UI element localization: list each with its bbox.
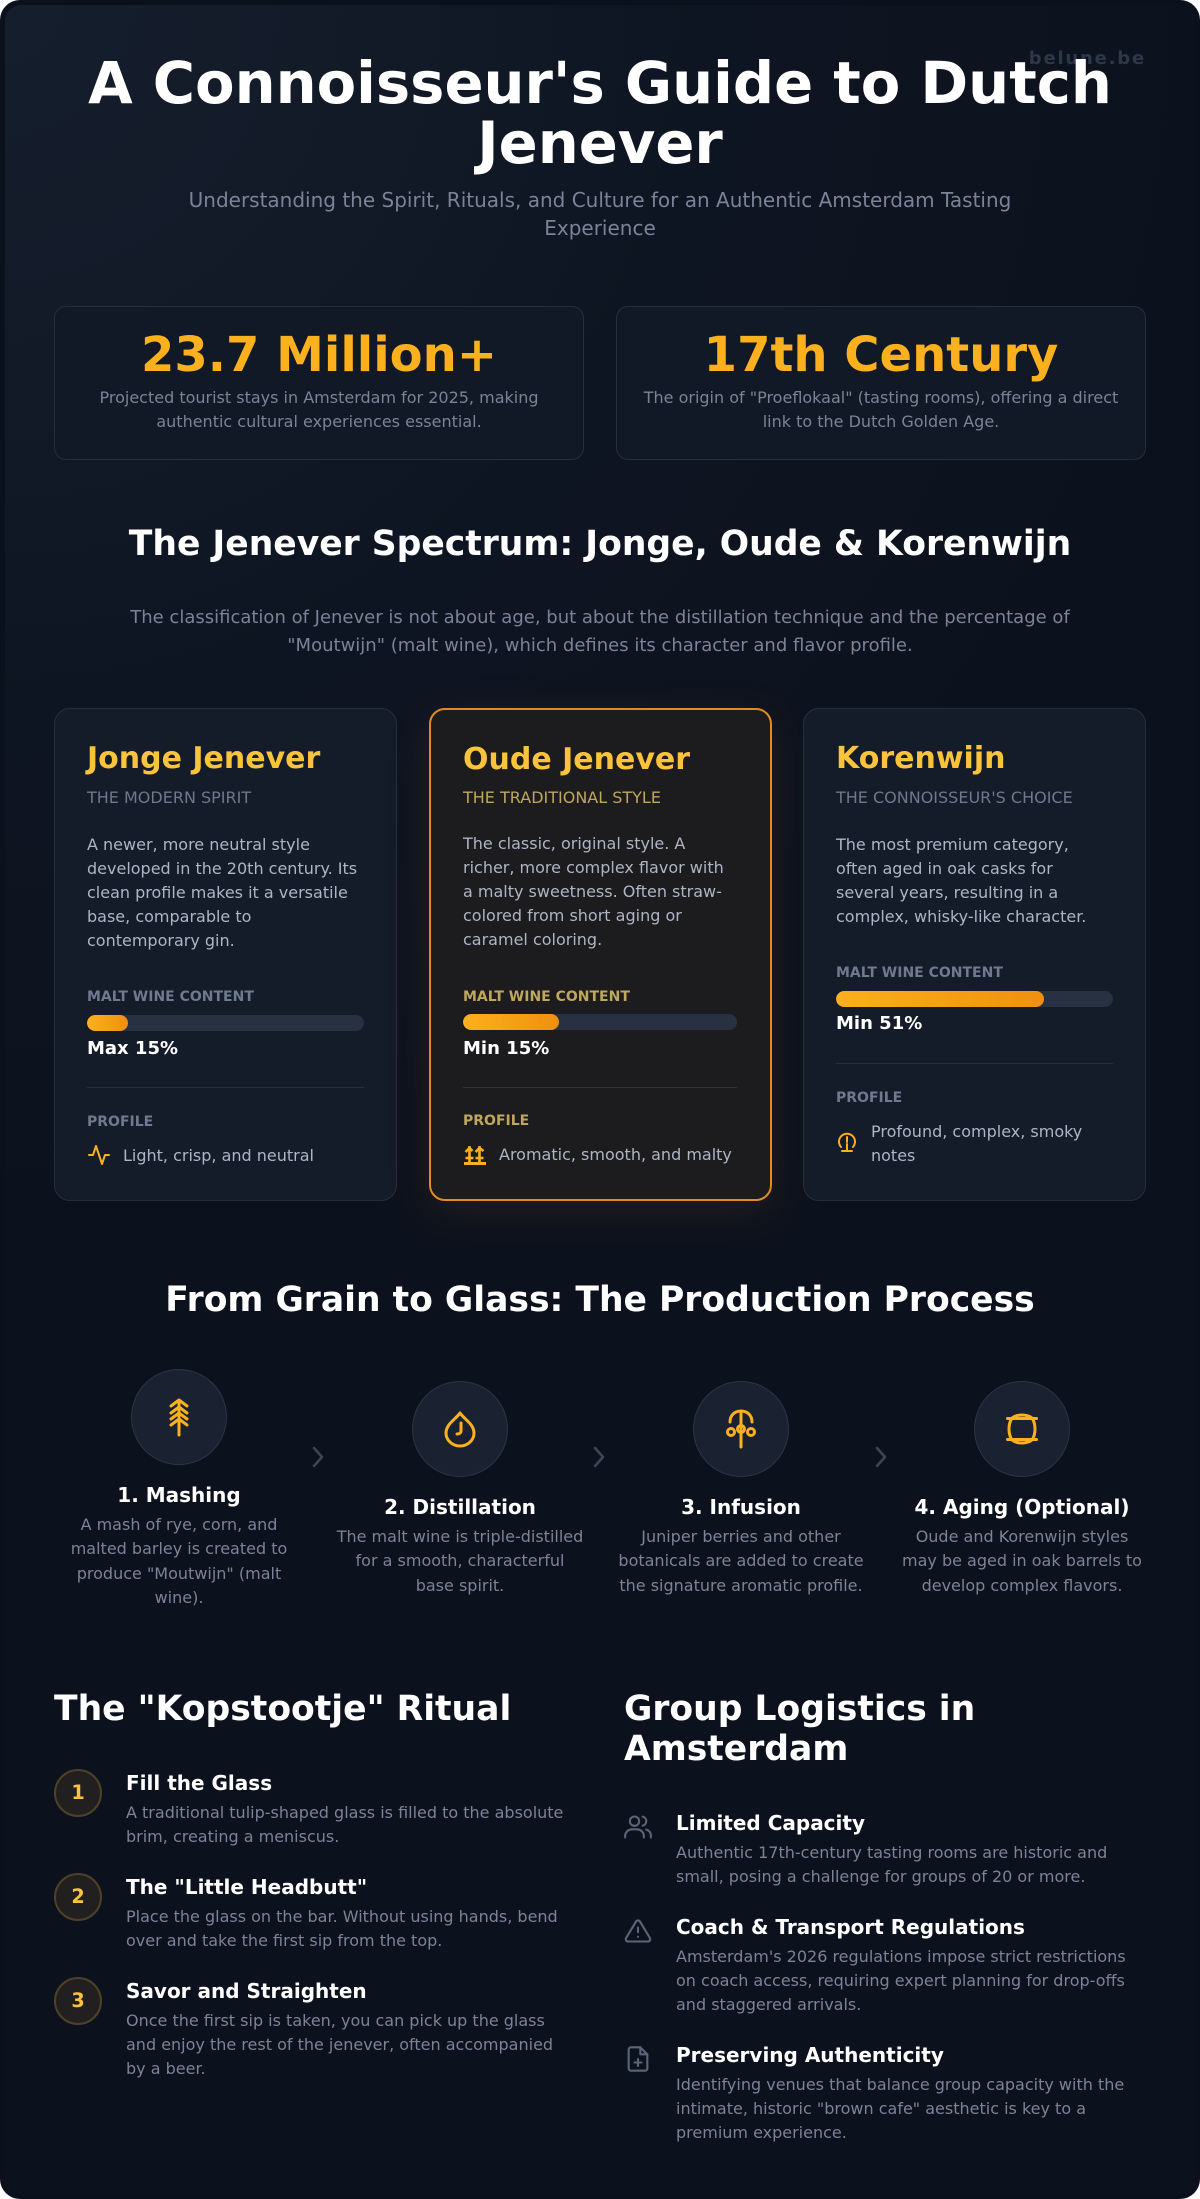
label: profile: PROFILE	[463, 1113, 529, 1129]
stat card: tourist stays	[54, 306, 584, 460]
card description: clean profile makes it a versatile	[87, 883, 348, 902]
step title: 1. Mashing	[117, 1483, 241, 1507]
card description: a malty sweetness. Often straw-	[463, 882, 722, 901]
step 1	[54, 1769, 563, 1846]
profile text: notes	[871, 1146, 915, 1165]
step text: Oude and Korenwijn styles	[916, 1527, 1128, 1546]
step text: A traditional tulip-shaped glass is filled to the absolute	[126, 1803, 563, 1822]
profile text	[871, 1122, 1082, 1165]
number badge	[54, 1977, 102, 2025]
stat description: Projected tourist stays in Amsterdam for 2025, making	[99, 388, 538, 407]
subtitle: Experience	[544, 216, 656, 240]
heading: Kopstootje ritual: The "Kopstootje" Ritual	[54, 1689, 511, 1729]
item: capacity	[624, 1811, 1107, 1886]
step text: for a smooth, characterful	[356, 1551, 564, 1570]
step text: produce "Moutwijn" (malt	[77, 1564, 281, 1583]
step text: Once the first sip is taken, you can pick up the glass	[126, 2011, 545, 2030]
icon: warning	[624, 1919, 652, 1942]
item text: small, posing a challenge for groups of 20 or more.	[676, 1867, 1085, 1886]
title: A Connoisseur's Guide to Dutch	[88, 50, 1112, 117]
card title: Korenwijn	[836, 741, 1005, 776]
label: profile: PROFILE	[836, 1090, 902, 1106]
profile text: Profound, complex, smoky	[871, 1122, 1082, 1141]
stat description	[644, 388, 1118, 431]
step text	[618, 1527, 864, 1595]
item text: Amsterdam's 2026 regulations impose strict restrictions	[676, 1947, 1126, 1966]
stat number: 23.7 Million+	[141, 327, 497, 383]
icon: grain	[131, 1369, 227, 1465]
step text: The malt wine is triple-distilled	[337, 1527, 583, 1546]
step text: develop complex flavors.	[922, 1576, 1122, 1595]
heading: group logistics: Group Logistics in	[624, 1689, 975, 1729]
item text	[676, 1843, 1107, 1886]
number badge: 2	[71, 1885, 85, 1908]
card description: contemporary gin.	[87, 931, 235, 950]
step text	[71, 1515, 287, 1607]
card description: complex, whisky-like character.	[836, 907, 1086, 926]
icon: grain stalks	[464, 1146, 486, 1165]
panel: Oude Jenever (featured)	[429, 708, 772, 1201]
card description: caramel coloring.	[463, 930, 602, 949]
step text	[336, 1527, 583, 1595]
card description	[462, 834, 724, 949]
icon: document plus	[628, 2046, 648, 2072]
stat card: 17th century	[616, 306, 1146, 460]
arrow	[876, 1446, 886, 1468]
profile text: Aromatic, smooth, and malty	[499, 1145, 732, 1164]
icon: drop	[412, 1381, 508, 1477]
panel: Jonge Jenever	[54, 708, 397, 1201]
card description: developed in the 20th century. Its	[87, 859, 357, 878]
step text: Place the glass on the bar. Without using hands, bend	[126, 1907, 558, 1926]
item text: premium experience.	[676, 2123, 847, 2142]
arrow	[312, 1446, 324, 1468]
step 3	[54, 1977, 553, 2078]
card description: base, comparable to	[87, 907, 251, 926]
section intro text	[130, 607, 1070, 656]
step text: Juniper berries and other	[641, 1527, 841, 1546]
step text: wine).	[155, 1588, 203, 1607]
card description: richer, more complex flavor with	[463, 858, 724, 877]
title: Jenever	[477, 110, 723, 177]
item text	[676, 1947, 1126, 2014]
arrow	[594, 1446, 604, 1468]
icon: gauge	[838, 1132, 856, 1152]
item text: Authentic 17th-century tasting rooms are historic and	[676, 1843, 1107, 1862]
card description: several years, resulting in a	[836, 883, 1058, 902]
step 2	[54, 1873, 558, 1950]
card title: Jonge Jenever	[87, 741, 320, 776]
step text	[902, 1527, 1142, 1595]
process step 2: distillation	[336, 1381, 583, 1595]
card description: The most premium category,	[836, 835, 1069, 854]
watermark: belune.be: belune.be	[1029, 48, 1146, 69]
profile text: Light, crisp, and neutral	[123, 1146, 314, 1165]
step text: malted barley is created to	[71, 1539, 287, 1558]
subtitle: Understanding the Spirit, Rituals, and Culture for an Authentic Amsterdam Tasting	[189, 188, 1011, 212]
icon: activity	[88, 1145, 110, 1165]
bar: min 15%	[463, 1014, 737, 1030]
step text	[126, 1907, 558, 1950]
malt value: Min 15%	[463, 1038, 549, 1059]
card description	[87, 835, 357, 950]
item title: Coach & Transport Regulations	[676, 1915, 1025, 1939]
bar: max 15%	[87, 1015, 364, 1031]
item title: Limited Capacity	[676, 1811, 865, 1835]
section intro text: The classification of Jenever is not about age, but about the distillation technique and the percentage of	[130, 607, 1070, 628]
item text: Identifying venues that balance group capacity with the	[676, 2075, 1124, 2094]
label: malt wine: MALT WINE CONTENT	[463, 989, 630, 1005]
label: profile: PROFILE	[87, 1114, 153, 1130]
card description: The classic, original style. A	[463, 834, 685, 853]
card subtitle: THE MODERN SPIRIT	[87, 788, 251, 807]
number badge: 1	[71, 1781, 85, 1804]
step text	[126, 2011, 553, 2078]
icon: barrel	[974, 1381, 1070, 1477]
malt value: Min 51%	[836, 1013, 922, 1034]
card subtitle: THE CONNOISSEUR'S CHOICE	[836, 788, 1073, 807]
stat description: The origin of "Proeflokaal" (tasting rooms), offering a direct	[644, 388, 1118, 407]
heading: group logistics: Amsterdam	[624, 1729, 848, 1769]
step text: the signature aromatic profile.	[619, 1576, 863, 1595]
card title: Oude Jenever	[463, 742, 690, 777]
bar: min 51%	[836, 991, 1113, 1007]
step title: Fill the Glass	[126, 1771, 272, 1795]
step text: may be aged in oak barrels to	[902, 1551, 1142, 1570]
item title: Preserving Authenticity	[676, 2043, 944, 2067]
ritual steps list	[54, 1769, 563, 2078]
step text: and enjoy the rest of the jenever, often accompanied	[126, 2035, 553, 2054]
panel: Korenwijn	[803, 708, 1146, 1201]
item: authenticity	[628, 2043, 1124, 2142]
step title: The "Little Headbutt"	[126, 1875, 367, 1899]
card description: often aged in oak casks for	[836, 859, 1053, 878]
item text: on coach access, requiring expert planning for drop-offs	[676, 1971, 1125, 1990]
step text: A mash of rye, corn, and	[81, 1515, 277, 1534]
title	[88, 50, 1112, 177]
card description: colored from short aging or	[463, 906, 682, 925]
icon: users	[624, 1816, 652, 1838]
number badge	[54, 1769, 102, 1817]
logistics list	[624, 1811, 1126, 2142]
card description	[836, 835, 1086, 926]
stat description	[99, 388, 538, 431]
card description: A newer, more neutral style	[87, 835, 310, 854]
number badge: 3	[71, 1989, 85, 2012]
step title: 3. Infusion	[681, 1495, 801, 1519]
malt value: Max 15%	[87, 1038, 178, 1059]
heading: group logistics	[624, 1689, 975, 1769]
icon: botanicals	[693, 1381, 789, 1477]
heading: Jenever spectrum: The Jenever Spectrum: Jonge, Oude & Korenwijn	[129, 524, 1071, 564]
item text	[676, 2073, 1124, 2145]
subtitle	[189, 188, 1011, 240]
stat number: 17th Century	[704, 327, 1058, 383]
step text: brim, creating a meniscus.	[126, 1827, 339, 1846]
process step 3: infusion	[618, 1381, 864, 1595]
step title: 4. Aging (Optional)	[914, 1495, 1130, 1519]
item: regulations	[624, 1915, 1126, 2014]
section intro text: "Moutwijn" (malt wine), which defines its character and flavor profile.	[287, 635, 913, 656]
item text: intimate, historic "brown cafe" aesthetic is key to a	[676, 2099, 1086, 2118]
process step 1: mashing	[71, 1369, 287, 1607]
item text: and staggered arrivals.	[676, 1995, 861, 2014]
step text: by a beer.	[126, 2059, 206, 2078]
stat description: authentic cultural experiences essential.	[156, 412, 482, 431]
step text: over and take the first sip from the top.	[126, 1931, 442, 1950]
label: malt wine: MALT WINE CONTENT	[87, 989, 254, 1005]
number badge	[54, 1873, 102, 1921]
step title: Savor and Straighten	[126, 1979, 367, 2003]
step text	[126, 1803, 563, 1846]
step text: base spirit.	[416, 1576, 504, 1595]
card subtitle: THE TRADITIONAL STYLE	[463, 788, 661, 807]
process step 4: aging	[902, 1381, 1142, 1595]
step text: botanicals are added to create	[618, 1551, 864, 1570]
stat description: link to the Dutch Golden Age.	[763, 412, 999, 431]
label: malt wine: MALT WINE CONTENT	[836, 965, 1003, 981]
step title: 2. Distillation	[384, 1495, 536, 1519]
heading: production process: From Grain to Glass: The Production Process	[165, 1280, 1035, 1320]
